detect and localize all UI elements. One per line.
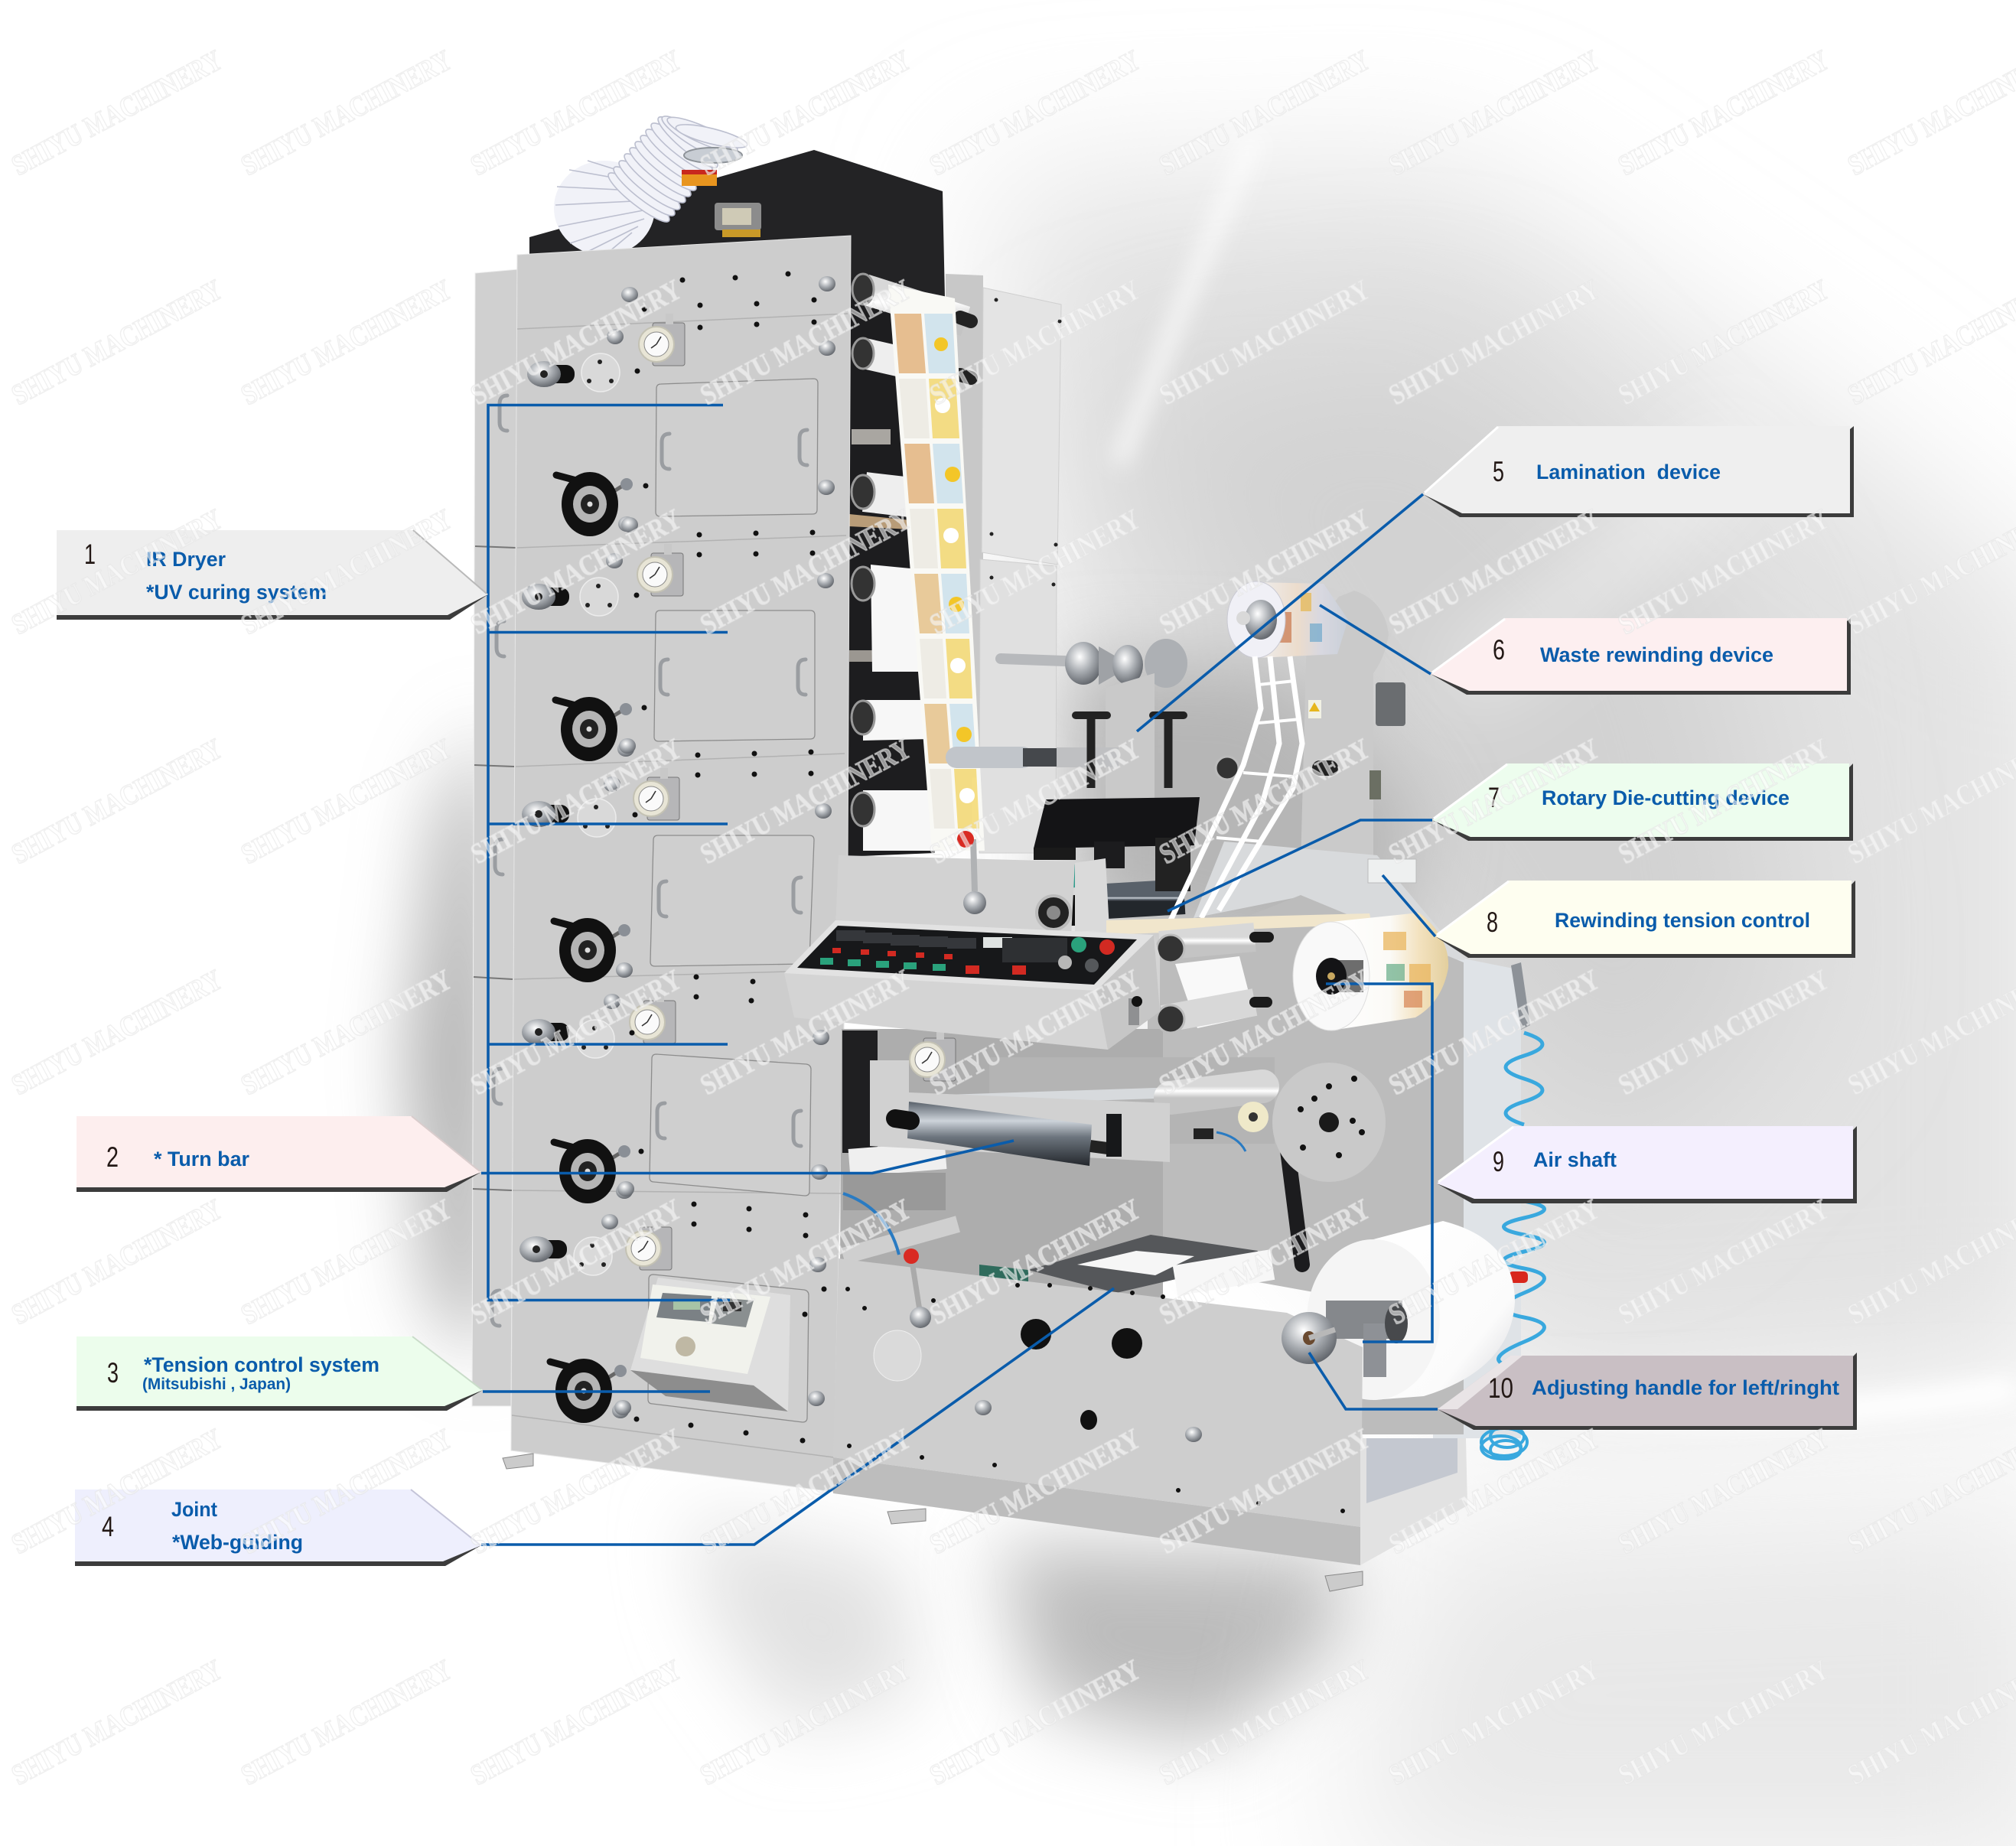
watermark grid: SHIYU MACHINERY [236, 1654, 458, 1792]
watermark grid: SHIYU MACHINERY [925, 964, 1146, 1102]
watermark grid: SHIYU MACHINERY [695, 1423, 917, 1561]
watermark grid: SHIYU MACHINERY [1155, 733, 1376, 871]
lamination shaft and cones [956, 639, 1187, 803]
watermark grid: SHIYU MACHINERY [1614, 1654, 1835, 1792]
watermark grid: SHIYU MACHINERY [1155, 1654, 1376, 1792]
upper front frame plate [835, 855, 1104, 937]
leader 9: air shaft [1326, 984, 1432, 1342]
lower front panel [833, 1258, 1363, 1527]
watermark grid: SHIYU MACHINERY [695, 733, 917, 871]
callout 1: IR dryer: *UV curing system [146, 581, 327, 604]
callout 2: turn bar: 2 [106, 1141, 119, 1173]
lower rollers under control panel [1157, 935, 1269, 1033]
upper white turn roller [946, 1086, 1262, 1100]
leader 10: adjusting handle [1309, 1353, 1438, 1409]
callout 7: rotary die-cutting device [1432, 763, 1853, 841]
leader 7: die cutting [1168, 820, 1432, 911]
printed strip running to rewinder [1106, 913, 1372, 935]
unit doors [648, 379, 818, 1422]
white roller at opening bottom-left [849, 1155, 946, 1163]
cream tension wheel and sensor [1194, 1102, 1269, 1151]
watermark grid: SHIYU MACHINERY [466, 1193, 687, 1331]
watermark grid: SHIYU MACHINERY [7, 274, 228, 412]
unwind shaft bracket [1326, 1301, 1408, 1377]
callout 6: waste rewinding device [1431, 618, 1851, 695]
red lever [957, 831, 986, 914]
watermark grid: SHIYU MACHINERY [466, 503, 687, 641]
callout 6: waste rewinding device: Waste rewinding device [1540, 643, 1773, 666]
flexible white duct [554, 110, 749, 256]
rear mounting plate [989, 1057, 1275, 1144]
watermark grid: SHIYU MACHINERY [1614, 733, 1835, 871]
dancer disc [1272, 1063, 1386, 1182]
callout 4: joint and web guiding: *Web-guiding [172, 1531, 303, 1554]
waste ladder web [1171, 656, 1302, 920]
heavy-duty connector [715, 203, 761, 237]
watermark grid: SHIYU MACHINERY [695, 274, 917, 412]
callout 10: adjusting handle [1438, 1353, 1857, 1430]
watermark grid: SHIYU MACHINERY [925, 1193, 1146, 1331]
watermark grid: SHIYU MACHINERY [1155, 964, 1376, 1102]
watermark grid: SHIYU MACHINERY [7, 44, 228, 182]
warning label [682, 170, 717, 186]
callout 4: joint and web guiding [75, 1489, 481, 1566]
bearing on die station [1037, 896, 1070, 930]
turn bar bracket plate [870, 1060, 1170, 1162]
tension controller base and slope plate [1194, 842, 1465, 960]
callout 10: adjusting handle: Adjusting handle for left/ringht [1532, 1376, 1839, 1399]
watermark grid: SHIYU MACHINERY [1614, 1193, 1835, 1331]
watermark grid: SHIYU MACHINERY [925, 274, 1146, 412]
callout 8: rewinding tension control: 8 [1487, 907, 1498, 938]
watermark grid: SHIYU MACHINERY [1384, 274, 1605, 412]
callout 7: rotary die-cutting device: 7 [1488, 782, 1500, 813]
watermark grid: SHIYU MACHINERY [466, 44, 687, 182]
watermark grid: SHIYU MACHINERY [1155, 44, 1376, 182]
callout 8: rewinding tension control [1435, 881, 1855, 958]
watermark grid: SHIYU MACHINERY [695, 964, 917, 1102]
watermark grid: SHIYU MACHINERY [236, 274, 458, 412]
watermark grid: SHIYU MACHINERY [1614, 44, 1835, 182]
callout 8: rewinding tension control: Rewinding tension control [1555, 909, 1810, 932]
leader lines [481, 405, 1438, 1545]
callout 7: rotary die-cutting device: Rotary Die-cutting device [1542, 786, 1790, 809]
callout 2: turn bar [77, 1116, 481, 1192]
watermark grid: SHIYU MACHINERY [1614, 964, 1835, 1102]
black rear wall of the opening [842, 1030, 878, 1153]
steel die cylinder [1050, 864, 1184, 926]
adjusting handwheel [1282, 1312, 1337, 1364]
watermark grid: SHIYU MACHINERY [236, 1193, 458, 1331]
watermark grid: SHIYU MACHINERY [1614, 1423, 1835, 1561]
watermark grid: SHIYU MACHINERY [466, 1654, 687, 1792]
watermark grid: SHIYU MACHINERY [1384, 44, 1605, 182]
watermark grid: SHIYU MACHINERY [466, 964, 687, 1102]
callout 5: lamination device: 5 [1493, 456, 1504, 487]
watermark grid: SHIYU MACHINERY [925, 733, 1146, 871]
watermark grid: SHIYU MACHINERY [925, 503, 1146, 641]
web guide and lower web [843, 1173, 1272, 1293]
watermark grid: SHIYU MACHINERY [7, 1193, 228, 1331]
leader 8: rewinding tension [1383, 875, 1435, 936]
panel screw holes [632, 274, 824, 1441]
small gauge in opening [910, 1029, 956, 1081]
rear upper tower panels [946, 274, 1061, 853]
watermark grid: SHIYU MACHINERY [466, 733, 687, 871]
die cutter black press block [1034, 797, 1200, 891]
right base shelf [1360, 1438, 1467, 1565]
watermark grid: SHIYU MACHINERY [1155, 1193, 1376, 1331]
watermark grid: SHIYU MACHINERY [1384, 503, 1605, 641]
base strip [833, 1457, 1361, 1565]
watermark grid: SHIYU MACHINERY [236, 964, 458, 1102]
watermark grid: SHIYU MACHINERY [1384, 1193, 1605, 1331]
callout 5: lamination device [1423, 426, 1854, 517]
callout 6: waste rewinding device: 6 [1493, 634, 1505, 666]
machine feet [503, 1454, 1363, 1591]
callout 2: turn bar: * Turn bar [154, 1148, 249, 1170]
printing unit rollers compartment [843, 274, 971, 857]
leader 2: turn bar [481, 1141, 1014, 1174]
waste roll [1227, 581, 1348, 658]
watermark grid: SHIYU MACHINERY [1384, 733, 1605, 871]
leader 1: IR dryer [488, 405, 730, 1301]
callout 3: tension control system: 3 [107, 1357, 119, 1389]
watermark grid: SHIYU MACHINERY [1384, 1423, 1605, 1561]
watermark grid: SHIYU MACHINERY [925, 1654, 1146, 1792]
callout 9: air shaft [1437, 1126, 1857, 1203]
watermark grid: SHIYU MACHINERY [1155, 1423, 1376, 1561]
door handles [657, 430, 807, 1146]
watermark grid: SHIYU MACHINERY [695, 1654, 917, 1792]
callout 4: joint and web guiding: Joint [171, 1498, 217, 1521]
watermark grid: SHIYU MACHINERY [1384, 1654, 1605, 1792]
leader 6: waste rewinding [1320, 605, 1431, 674]
watermark grid: SHIYU MACHINERY [695, 1193, 917, 1331]
lower panel knobs and plate [848, 1249, 1343, 1511]
watermark grid: SHIYU MACHINERY [466, 274, 687, 412]
panel seams [512, 314, 848, 1457]
callout 4: joint and web guiding: 4 [102, 1511, 114, 1542]
watermark grid: SHIYU MACHINERY [695, 503, 917, 641]
die station side frame [1075, 858, 1109, 932]
handwheels [550, 472, 635, 1423]
dancer arm [1282, 1109, 1302, 1265]
watermark grid: SHIYU MACHINERY [695, 44, 917, 182]
callout 1: IR dryer: 1 [84, 539, 96, 570]
dryer black box [529, 150, 945, 298]
callout 1: IR dryer [57, 530, 488, 620]
watermark grid: SHIYU MACHINERY [1155, 503, 1376, 641]
watermark grid: SHIYU MACHINERY [1384, 964, 1605, 1102]
callout 3: tension control system: *Tension control system [144, 1353, 379, 1376]
watermark grid: SHIYU MACHINERY [7, 964, 228, 1102]
Mitsubishi tension controller [630, 1278, 790, 1411]
turn bar roller [895, 1102, 1122, 1166]
watermark grid: SHIYU MACHINERY [7, 1423, 228, 1561]
watermark grid: SHIYU MACHINERY [1614, 274, 1835, 412]
duct clamp ring [684, 148, 742, 163]
machine illustration [472, 110, 1544, 1591]
watermark grid: SHIYU MACHINERY [7, 503, 228, 641]
recess opening [840, 1029, 1163, 1301]
watermark grid: SHIYU MACHINERY [236, 1423, 458, 1561]
round cover plates [574, 353, 620, 1275]
watermark grid: SHIYU MACHINERY [236, 733, 458, 871]
watermark grid: SHIYU MACHINERY [925, 1423, 1146, 1561]
hex bolts [601, 276, 858, 1415]
waste rewinding tower [1301, 591, 1405, 880]
callout 3: tension control system: (Mitsubishi , Japan) [142, 1376, 291, 1393]
watermark grid: SHIYU MACHINERY [1155, 274, 1376, 412]
leader 4: web guiding [481, 1288, 1114, 1545]
callout 9: air shaft: 9 [1493, 1146, 1504, 1177]
callout 3: tension control system [77, 1336, 483, 1411]
control panel [784, 920, 1160, 1050]
big unwind paper roll [1307, 1221, 1515, 1400]
printed label web [888, 285, 985, 851]
rewinder back plate [1148, 895, 1464, 1434]
callout 9: air shaft: Air shaft [1533, 1148, 1617, 1171]
watermark grid: SHIYU MACHINERY [7, 1654, 228, 1792]
left side column [472, 269, 518, 1406]
rewinder paper roll [1293, 913, 1448, 1030]
pressure gauges [626, 314, 685, 1270]
watermark grid: SHIYU MACHINERY [236, 44, 458, 182]
watermark grid: SHIYU MACHINERY [466, 1423, 687, 1561]
callout 1: IR dryer: IR Dryer [146, 548, 226, 571]
air hose and gun on the right side [1481, 962, 1544, 1459]
main tower front panel [511, 236, 851, 1492]
small idler roller [1216, 757, 1330, 780]
leader 5: lamination [1137, 494, 1423, 731]
watermark grid: SHIYU MACHINERY [1614, 503, 1835, 641]
watermark grid: SHIYU MACHINERY [236, 503, 458, 641]
right side light panel [1433, 952, 1521, 1438]
shaft couplings [519, 361, 575, 1262]
callout 10: adjusting handle: 10 [1488, 1372, 1513, 1404]
watermark grid: SHIYU MACHINERY [7, 733, 228, 871]
callout 5: lamination device: Lamination device [1536, 461, 1721, 483]
leader 3: tension control [483, 1390, 710, 1393]
watermark grid: SHIYU MACHINERY [925, 44, 1146, 182]
